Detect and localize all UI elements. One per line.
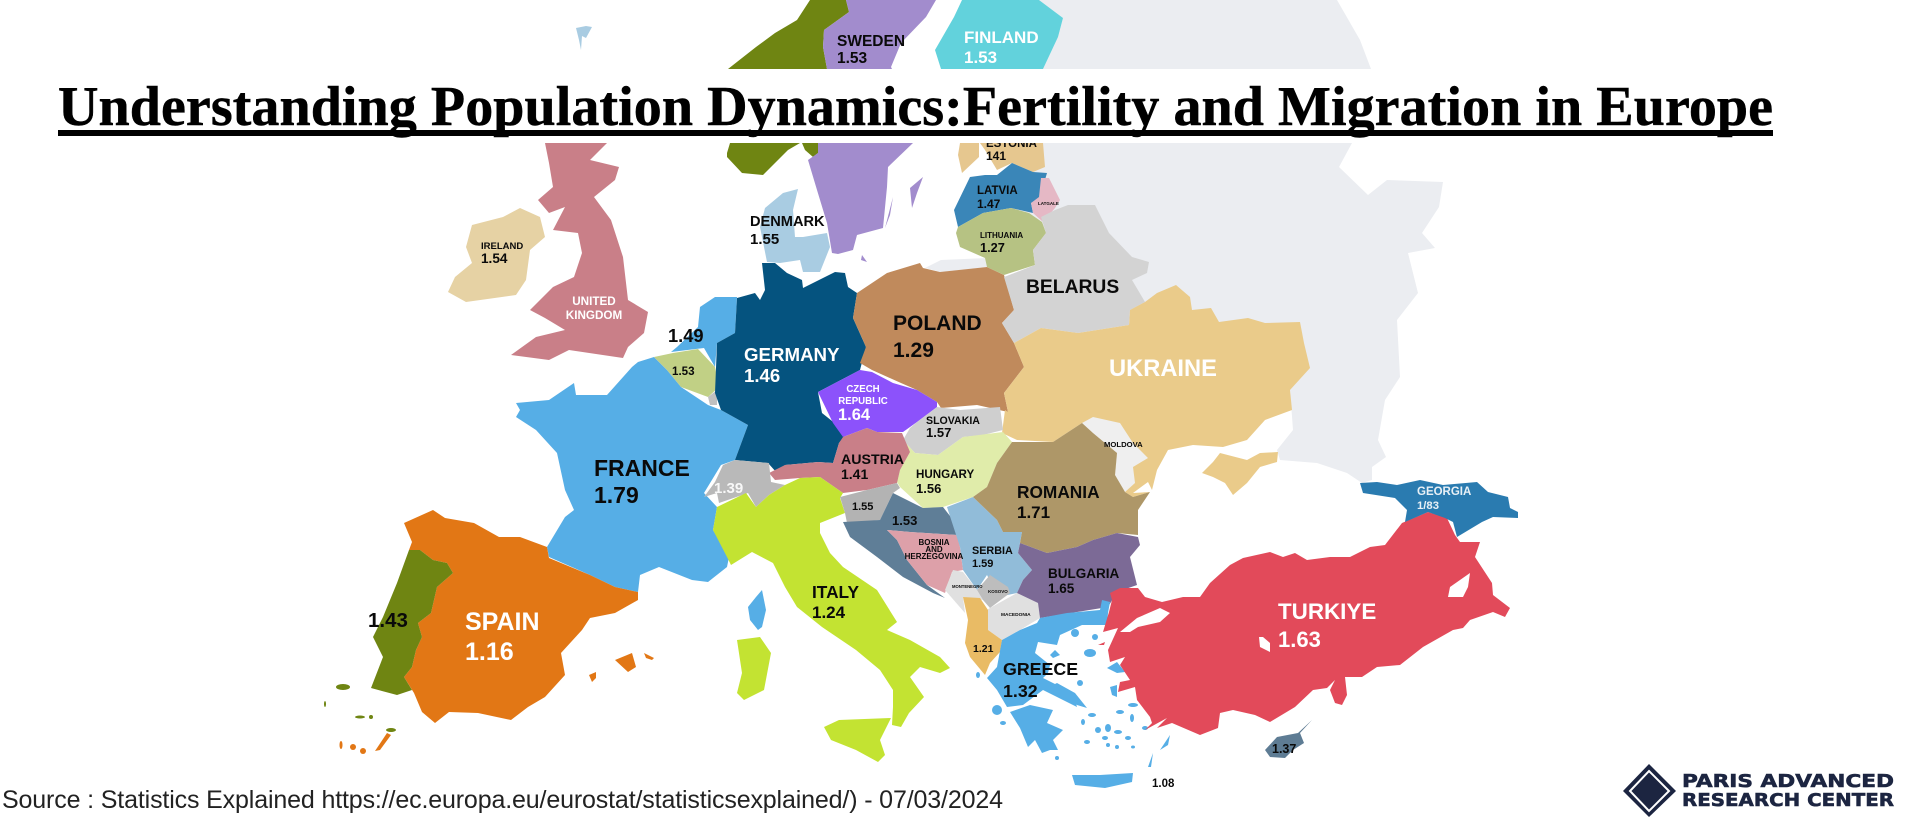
country: slovakia xyxy=(903,407,1003,455)
label: finland value: 1.53 xyxy=(964,48,997,67)
country: turkiye xyxy=(1098,512,1510,735)
label: slovenia value: 1.55 xyxy=(852,501,873,513)
label: denmark: DENMARK xyxy=(750,214,825,230)
lake: tuz xyxy=(1259,637,1270,652)
label: france: FRANCE xyxy=(594,455,690,481)
label: hungary value: 1.56 xyxy=(916,481,941,496)
country: georgia xyxy=(1360,480,1518,537)
country: greece xyxy=(976,600,1170,788)
country: latgale xyxy=(1031,178,1060,222)
country: bosnia and herzegovina xyxy=(887,530,963,593)
label: italy: ITALY xyxy=(812,582,860,602)
country: estonia xyxy=(958,143,1045,173)
label: estonia: ESTONIA xyxy=(986,138,1037,150)
country: ukraine xyxy=(1002,285,1310,497)
country: austria xyxy=(769,428,910,493)
label: croatia value: 1.53 xyxy=(892,513,917,528)
label: serbia value: 1.59 xyxy=(972,558,993,570)
label: france value: 1.79 xyxy=(594,482,639,508)
label: bosnia and herzegovina: BOSNIA xyxy=(918,538,950,547)
label: romania value: 1.71 xyxy=(1017,503,1050,522)
label: bosnia and herzegovina: HERZEGOVINA xyxy=(905,552,964,561)
country: czech republic xyxy=(818,370,937,437)
logo: paris advanced research center: RESEARCH CENTER xyxy=(1682,790,1894,811)
label: estonia value: 141 xyxy=(986,149,1006,163)
label: ireland: IRELAND xyxy=(481,241,523,252)
country: ireland xyxy=(448,208,545,302)
label: latvia: LATVIA xyxy=(977,185,1018,197)
country: slovenia xyxy=(840,483,900,523)
country: united kingdom xyxy=(511,143,648,360)
label: bosnia and herzegovina xyxy=(905,538,964,561)
label: lithuania: LITHUANIA xyxy=(980,231,1023,240)
country: croatia xyxy=(843,493,957,598)
label: montenegro: MONTENEGRO xyxy=(952,584,983,589)
label: denmark value: 1.55 xyxy=(750,231,779,248)
label: switzerland value: 1.39 xyxy=(714,480,743,497)
country: luxembourg xyxy=(708,390,717,405)
country: moldova xyxy=(1082,417,1148,492)
label: czech republic value: 1.64 xyxy=(838,406,871,424)
label: macedonia: MACEDONIA xyxy=(1001,612,1031,618)
country: italy xyxy=(713,477,950,762)
label: germany: GERMANY xyxy=(744,344,840,365)
country: serbia xyxy=(947,497,1032,597)
label: slovakia: SLOVAKIA xyxy=(926,415,980,427)
label: austria: AUSTRIA xyxy=(841,452,904,468)
country: north macedonia xyxy=(987,593,1040,640)
label: czech republic: CZECH xyxy=(846,384,880,395)
country: finland xyxy=(935,0,1063,69)
country: portugal xyxy=(324,550,453,732)
country: belarus xyxy=(1002,205,1149,343)
label: sweden value: 1.53 xyxy=(837,50,868,67)
label: united kingdom: KINGDOM xyxy=(566,309,622,322)
country: france xyxy=(516,357,766,630)
label: bulgaria value: 1.65 xyxy=(1048,581,1075,596)
label: germany value: 1.46 xyxy=(744,365,780,386)
label: united kingdom: UNITED xyxy=(572,295,616,308)
label: united kingdom xyxy=(566,295,622,322)
label: spain: SPAIN xyxy=(465,608,540,636)
label: malta value: 1.08 xyxy=(1152,778,1175,790)
country: netherlands xyxy=(671,297,737,367)
label: slovakia value: 1.57 xyxy=(926,425,951,440)
label: romania: ROMANIA xyxy=(1017,482,1100,502)
label: czech republic xyxy=(838,384,888,407)
label: portugal value: 1.43 xyxy=(368,609,408,632)
source note: Source : Statistics Explained https://ec.europa.eu/eurostat/statisticsexplained/) - 07/03/2024 xyxy=(2,786,1003,814)
country: montenegro xyxy=(945,570,983,613)
label: austria value: 1.41 xyxy=(841,466,868,482)
label: poland value: 1.29 xyxy=(893,339,934,362)
label: lithuania value: 1.27 xyxy=(980,240,1005,255)
label: sweden: SWEDEN xyxy=(837,33,905,50)
label: czech republic: REPUBLIC xyxy=(838,396,888,407)
label: finland: FINLAND xyxy=(964,28,1039,47)
logo: paris advanced research center: PARIS ADVANCED xyxy=(1682,771,1894,792)
label: bosnia and herzegovina: AND xyxy=(925,545,943,554)
country: faroe islands xyxy=(576,26,592,50)
label: turkiye: TURKIYE xyxy=(1278,599,1376,624)
label: ukraine: UKRAINE xyxy=(1109,356,1217,382)
label: belarus: BELARUS xyxy=(1026,277,1119,298)
country: lithuania xyxy=(956,208,1046,275)
label: bulgaria: BULGARIA xyxy=(1048,566,1119,581)
country: switzerland xyxy=(704,460,785,507)
label: turkiye value: 1.63 xyxy=(1278,627,1321,652)
country: poland xyxy=(853,263,1024,412)
label: belgium value: 1.53 xyxy=(672,365,695,378)
country: hungary xyxy=(897,432,1012,508)
label: georgia: GEORGIA xyxy=(1417,486,1471,498)
country: spain xyxy=(340,510,654,754)
country: latvia xyxy=(954,163,1047,227)
label: netherlands value: 1.49 xyxy=(668,325,704,346)
title band xyxy=(0,69,1907,143)
label: cyprus value: 1.37 xyxy=(1272,742,1296,756)
lake: marmara xyxy=(1120,608,1170,632)
country: bulgaria xyxy=(1017,533,1140,618)
label: poland: POLAND xyxy=(893,312,982,335)
logo: paris advanced research center xyxy=(1623,764,1894,817)
label: georgia value: 1/83 xyxy=(1417,500,1439,512)
label: kosovo: KOSOVO xyxy=(988,589,1008,594)
label: moldova: MOLDOVA xyxy=(1104,440,1143,449)
country: albania xyxy=(963,597,1002,675)
country: romania xyxy=(973,423,1150,553)
label: albania value: 1.21 xyxy=(973,643,994,655)
map: russia background xyxy=(925,0,1443,483)
label: greece: GREECE xyxy=(1003,659,1078,679)
country: sweden xyxy=(808,0,936,262)
label: spain value: 1.16 xyxy=(465,638,514,666)
label: latvia value: 1.47 xyxy=(977,197,1001,211)
label: ireland value: 1.54 xyxy=(481,251,508,266)
country: norway xyxy=(727,0,849,175)
lake: van xyxy=(1448,573,1470,597)
country: cyprus xyxy=(1265,720,1312,758)
country: denmark xyxy=(760,189,830,272)
label: italy value: 1.24 xyxy=(812,603,846,622)
label: hungary: HUNGARY xyxy=(916,468,974,481)
label: serbia: SERBIA xyxy=(972,545,1013,557)
label: latgale: LATGALE xyxy=(1038,201,1059,206)
country: belgium xyxy=(654,349,719,397)
country: germany xyxy=(715,263,866,473)
country: kosovo xyxy=(977,575,1010,608)
label: greece value: 1.32 xyxy=(1003,681,1038,701)
title: Understanding Population Dynamics:Fertility and Migration in Europe xyxy=(58,76,1773,138)
